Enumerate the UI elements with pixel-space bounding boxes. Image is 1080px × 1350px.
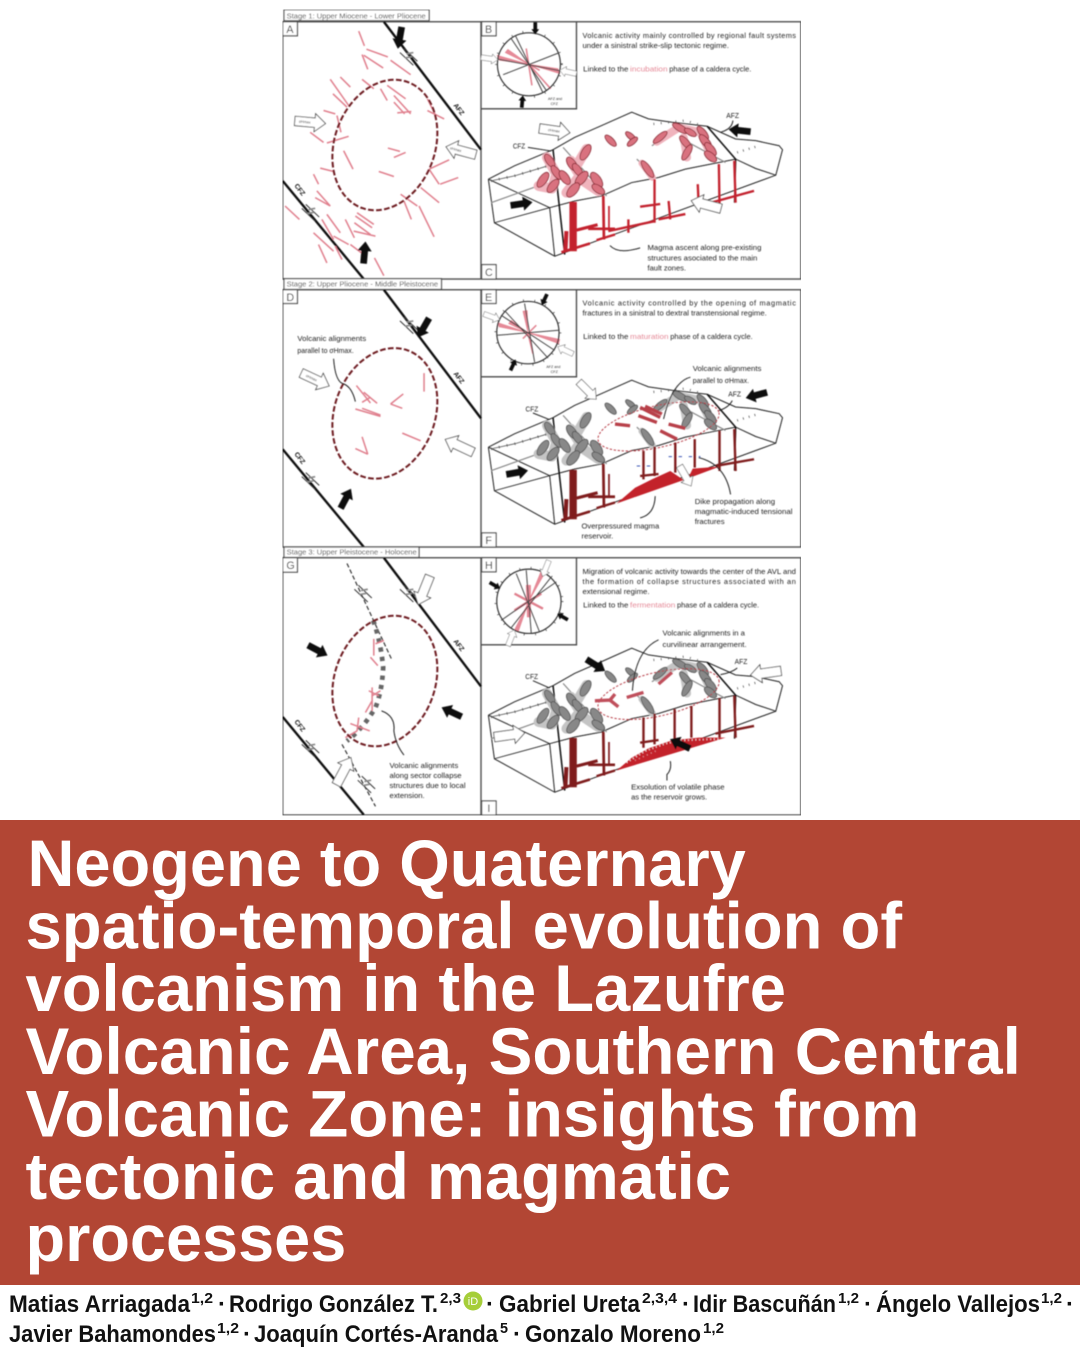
- panel I: block diagram with volatile exsolution: Exsolution of volatile phase: [631, 783, 725, 792]
- panel G: map with sector collapse structures: CFZ: [292, 719, 306, 733]
- panel F: block diagram with magma reservoir: Volcanic alignments: [693, 364, 762, 373]
- stage 2 heading: Stage 2: Upper Pliocene - Middle Pleistocene: [287, 279, 438, 288]
- text block: stage 2 description: maturation: [630, 332, 669, 341]
- panel C: block diagram: σHmax: [548, 128, 560, 134]
- panel A: map with fault zones: σHmax: [299, 120, 311, 125]
- text block: stage 2 description: Volcanic activity controlled by the opening of magmatic: [583, 298, 796, 307]
- authors: 1,2: [217, 1320, 239, 1337]
- panel E: rose diagram: CFZ: [551, 370, 559, 374]
- authors: Joaquín Cortés-Aranda: [254, 1321, 499, 1348]
- text block: stage 1 description: phase of a caldera cycle.: [669, 64, 751, 73]
- panel C: block diagram: CFZ: [513, 141, 526, 150]
- authors: ·: [513, 1321, 521, 1348]
- text block: stage 3 description: the formation of collapse structures associated with an: [583, 577, 796, 586]
- panel I: block diagram with volatile exsolution: CFZ: [525, 672, 538, 681]
- panel F: block diagram with magma reservoir: fractures: [695, 517, 725, 526]
- text block: stage 3 description: fermentation: [630, 600, 675, 609]
- panel G: map with sector collapse structures: along sector collapse: [390, 771, 462, 780]
- panel: stage 1: [283, 10, 801, 279]
- panel A: map with fault zones: σHmax: [449, 146, 462, 153]
- authors: Gabriel Ureta: [499, 1291, 641, 1318]
- text block: stage 3 description: Migration of volcanic activity towards the center of the AVL and: [583, 567, 796, 576]
- panel I: block diagram with volatile exsolution: I: [487, 803, 490, 815]
- authors: 1,2: [191, 1290, 213, 1307]
- figure: three-stage tectonic evolution diagrams: [283, 10, 801, 815]
- authors: 2,3: [440, 1290, 461, 1307]
- text block: stage 1 description: under a sinistral strike-slip tectonic regime.: [583, 41, 729, 50]
- panel B: rose diagram: AFZ and: [548, 97, 562, 101]
- text block: stage 3 description: [583, 567, 796, 609]
- authors: Idir Bascuñán: [693, 1291, 836, 1318]
- icon: ORCID badge: [464, 1292, 482, 1310]
- panel I: block diagram with volatile exsolution: Volcanic alignments in a: [663, 628, 746, 637]
- authors: 2,3,4: [642, 1290, 678, 1307]
- panel D: map with volcanic alignments: Volcanic alignments: [297, 334, 366, 343]
- panel I: block diagram with volatile exsolution: AFZ: [735, 657, 748, 666]
- text block: stage 2 description: [583, 298, 796, 341]
- panel C: block diagram: fault zones.: [647, 263, 686, 272]
- panel I: block diagram with volatile exsolution: [482, 628, 782, 815]
- panel F: block diagram with magma reservoir: reservoir.: [581, 531, 613, 540]
- authors: ·: [1066, 1291, 1074, 1318]
- panel G: map with sector collapse structures: G: [286, 560, 295, 572]
- title: tectonic and magmatic: [26, 1140, 731, 1213]
- text block: stage 2 description: Linked to the: [583, 332, 628, 341]
- panel H: rose diagram: [482, 558, 570, 648]
- panel A: map with fault zones: [283, 22, 481, 279]
- panel G: map with sector collapse structures: extension.: [390, 791, 425, 800]
- panel F: block diagram with magma reservoir: [482, 364, 793, 547]
- panel I: block diagram with volatile exsolution: as the reservoir grows.: [631, 793, 707, 802]
- panel F: block diagram with magma reservoir: Dike propagation along: [695, 497, 775, 506]
- authors: ·: [243, 1321, 251, 1348]
- authors: [9, 1290, 1074, 1348]
- panel F: block diagram with magma reservoir: magmatic-induced tensional: [695, 507, 793, 516]
- magma reservoir: [617, 467, 720, 503]
- authors: 1,2: [703, 1320, 724, 1337]
- panel E: rose diagram: AFZ and: [546, 365, 560, 369]
- title band background: [0, 820, 1080, 1285]
- title: Volcanic Zone: insights from: [26, 1078, 920, 1150]
- title: [26, 827, 1021, 1275]
- title: spatio-temporal evolution of: [26, 889, 902, 963]
- panel: stage 2: [283, 279, 801, 547]
- authors: Gonzalo Moreno: [525, 1321, 701, 1348]
- panel E: rose diagram: [482, 290, 575, 374]
- title: processes: [26, 1202, 346, 1275]
- panel D: map with volcanic alignments: [283, 290, 481, 547]
- title: Volcanic Area, Southern Central: [26, 1015, 1021, 1088]
- magma reservoir with volatile bubbles: [617, 738, 726, 770]
- panel F: block diagram with magma reservoir: F: [485, 535, 492, 547]
- title: volcanism in the Lazufre: [26, 952, 786, 1025]
- authors: 1,2: [1041, 1290, 1062, 1307]
- panel F: block diagram with magma reservoir: CFZ: [526, 404, 539, 413]
- panel A: map with fault zones: A: [286, 24, 294, 36]
- panel frame: stage 3: [283, 558, 801, 815]
- text block: stage 3 description: Linked to the: [583, 600, 628, 609]
- panel C: block diagram: C: [485, 267, 493, 279]
- authors: Matias Arriagada: [9, 1291, 191, 1318]
- panel: stage 3: [283, 547, 801, 815]
- text block: stage 3 description: extensional regime.: [583, 587, 650, 596]
- text block: stage 2 description: phase of a caldera cycle.: [670, 332, 753, 341]
- authors: 1,2: [838, 1290, 859, 1307]
- authors: ·: [682, 1291, 690, 1318]
- authors: ·: [486, 1291, 494, 1318]
- panel H: rose diagram: H: [485, 560, 493, 572]
- authors: Rodrigo González T.: [229, 1291, 438, 1318]
- panel B: rose diagram: B: [485, 24, 492, 36]
- panel G: map with sector collapse structures: structures due to local: [390, 781, 466, 790]
- authors: 5: [500, 1320, 508, 1337]
- panel C: block diagram: structures asociated to the main: [647, 253, 757, 262]
- stage 3 heading: Stage 3: Upper Pleistocene - Holocene: [287, 548, 417, 557]
- panel frame: stage 1: [283, 22, 801, 279]
- panel B: rose diagram: CFZ: [551, 102, 559, 106]
- text block: stage 2 description: fractures in a sinistral to dextral transtensional regime.: [583, 309, 767, 318]
- stage 1 heading: Stage 1: Upper Miocene - Lower Pliocene: [287, 11, 426, 20]
- panel F: block diagram with magma reservoir: AFZ: [728, 389, 741, 398]
- panel C: block diagram: AFZ: [726, 111, 739, 120]
- panel frame: stage 2: [283, 290, 801, 547]
- authors: Ángelo Vallejos: [876, 1290, 1040, 1318]
- text block: stage 1 description: [583, 31, 796, 73]
- panel A: map with fault zones: CFZ: [292, 183, 306, 197]
- panel D: map with volcanic alignments: AFZ: [452, 371, 465, 385]
- text block: stage 1 description: Linked to the: [583, 64, 628, 73]
- panel D: map with volcanic alignments: CFZ: [292, 451, 306, 466]
- panel A: map with fault zones: AFZ: [452, 102, 465, 117]
- panel F: block diagram with magma reservoir: Overpressured magma: [581, 521, 660, 530]
- panel D: map with volcanic alignments: D: [286, 292, 294, 304]
- authors: ·: [864, 1291, 872, 1318]
- authors: ·: [218, 1291, 226, 1318]
- text block: stage 3 description: phase of a caldera cycle.: [677, 600, 759, 609]
- panel D: map with volcanic alignments: parallel to σHmax.: [297, 346, 354, 355]
- text block: stage 1 description: Volcanic activity mainly controlled by regional fault systems: [583, 31, 796, 40]
- icon: ORCID badge: iD: [468, 1296, 478, 1308]
- panel C: block diagram: [482, 111, 782, 279]
- panel C: block diagram: Magma ascent along pre-existing: [647, 243, 761, 252]
- panel G: map with sector collapse structures: [283, 558, 481, 815]
- panel I: block diagram with volatile exsolution: curvilinear arrangement.: [663, 640, 747, 649]
- panel D: map with volcanic alignments: σHmax: [305, 374, 318, 382]
- panel E: rose diagram: E: [485, 292, 492, 304]
- panel F: block diagram with magma reservoir: parallel to σHmax.: [693, 376, 749, 385]
- panel B: rose diagram: [480, 22, 577, 108]
- title: Neogene to Quaternary: [28, 827, 746, 900]
- panel G: map with sector collapse structures: Volcanic alignments: [390, 761, 459, 770]
- authors: Javier Bahamondes: [9, 1321, 216, 1348]
- panel G: map with sector collapse structures: AFZ: [452, 638, 465, 653]
- text block: stage 1 description: incubation: [630, 64, 668, 73]
